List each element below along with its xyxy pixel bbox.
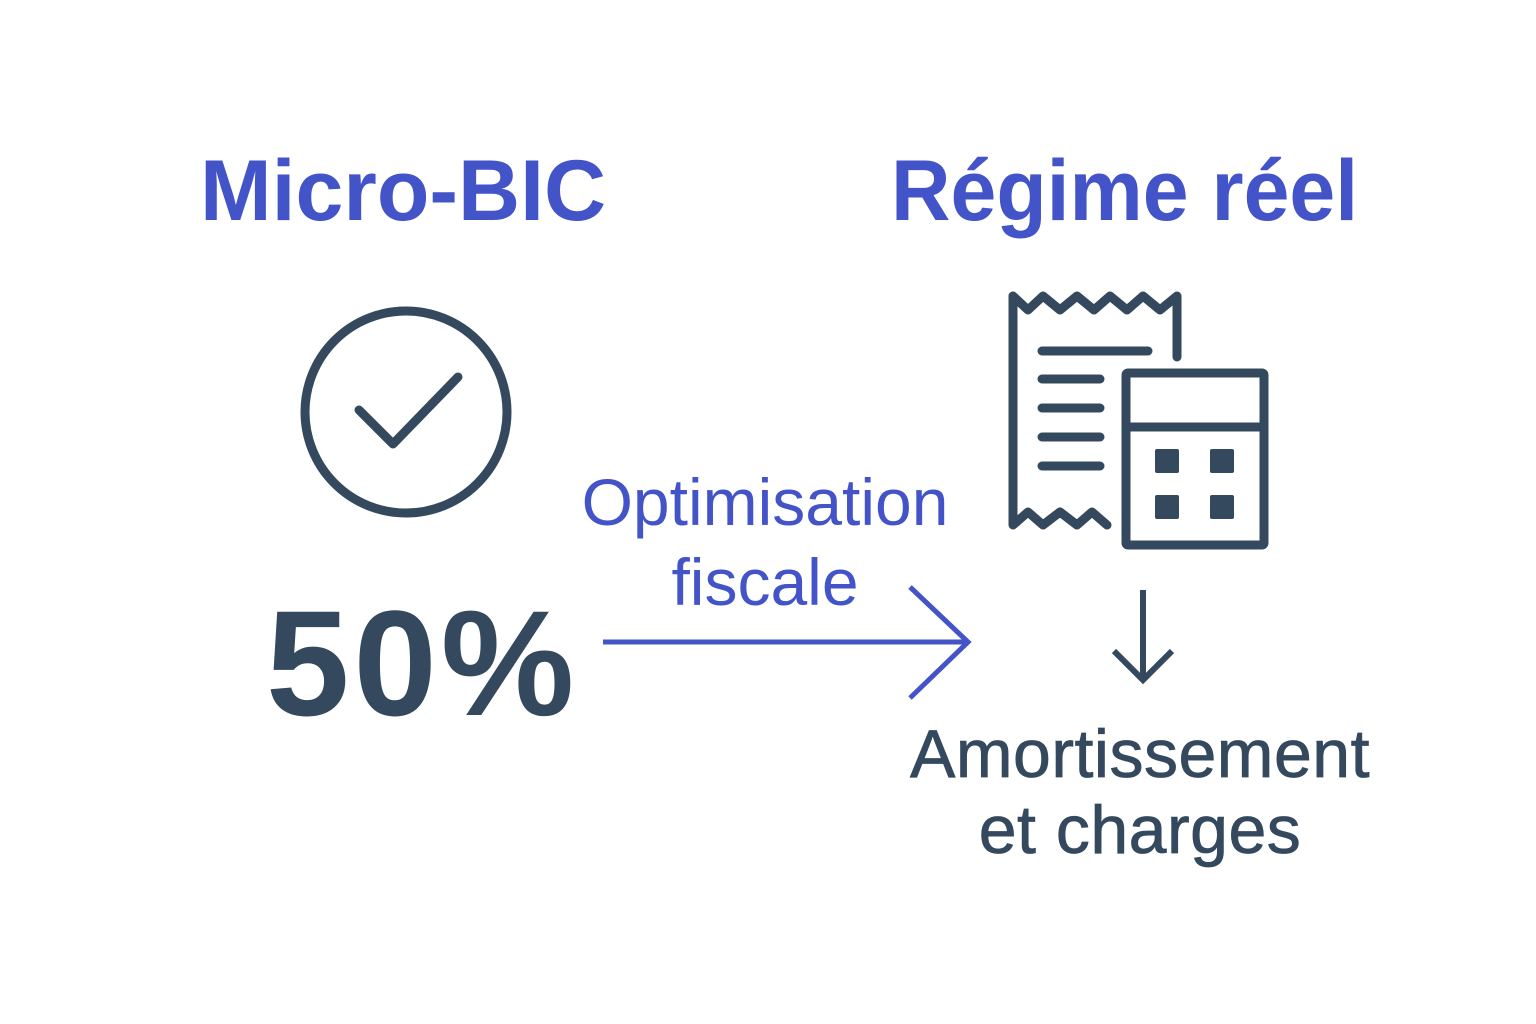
label: Amortissement et charges: Amortissement (910, 716, 1370, 792)
label: Optimisation fiscale (582, 465, 948, 619)
label: Amortissement et charges: et charges (979, 792, 1301, 868)
label: Amortissement et charges (910, 716, 1370, 868)
value: 50%: 50% (266, 579, 578, 747)
title: Micro-BIC: Micro-BIC (200, 143, 606, 239)
label: Optimisation fiscale: Optimisation (582, 465, 948, 539)
title: Régime réel: Régime réel (891, 143, 1358, 239)
label: Optimisation fiscale: fiscale (671, 545, 859, 619)
